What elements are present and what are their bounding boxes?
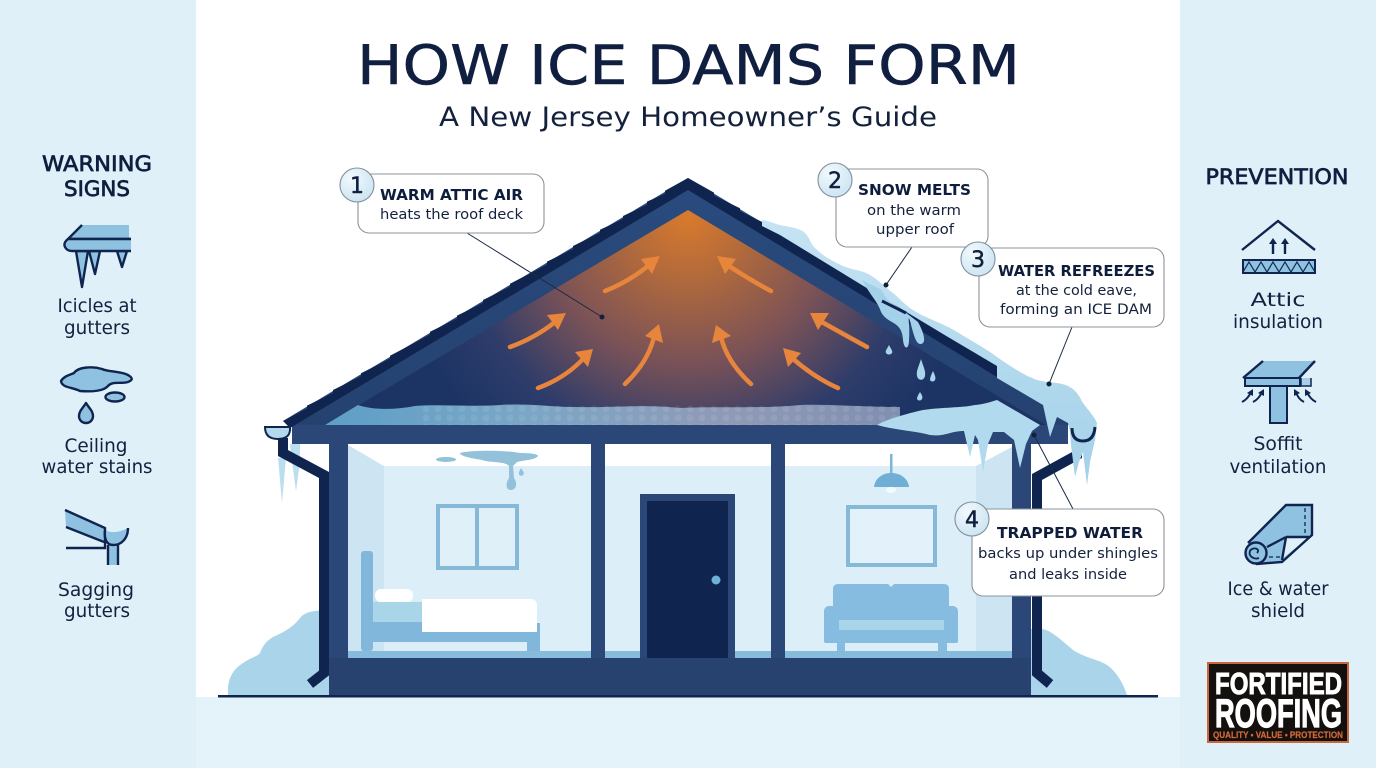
icon: soffit ventilation: [1242, 361, 1316, 423]
roof structure and beam: [283, 178, 1085, 444]
roof snow layer: [762, 220, 1097, 485]
prevention panel: [1206, 165, 1348, 622]
bedroom: [348, 445, 591, 658]
ceiling lamp: [874, 454, 909, 493]
label: sagging gutters line two: gutters: [64, 600, 130, 622]
sofa: [824, 584, 958, 651]
title: HOW ICE DAMS FORM: [357, 34, 1020, 97]
warning signs heading: WARNING: [42, 152, 152, 176]
callout 2: upper roof: [876, 222, 955, 238]
bottom strip: [196, 697, 1180, 768]
door: [640, 494, 735, 658]
house walls: [329, 444, 1031, 658]
label: icicles at gutters: Icicles at: [58, 295, 136, 317]
logo: Fortified Roofing: [1208, 663, 1348, 742]
callout 3: at the cold eave,: [1016, 283, 1137, 299]
label: sagging gutters: Sagging: [58, 579, 134, 601]
callout 3: 3: [971, 248, 985, 273]
label: ceiling water stains line two: water stains: [42, 456, 152, 478]
logo: Fortified Roofing: QUALITY • VALUE • PROTECTION: [1213, 730, 1343, 741]
callout 2: [818, 163, 988, 288]
wall picture: [848, 507, 935, 565]
callout 2: SNOW MELTS: [858, 181, 971, 199]
house floor: [329, 658, 1031, 695]
window: [436, 504, 519, 570]
callout 4: backs up under shingles: [978, 546, 1158, 562]
middle room: [605, 466, 771, 658]
snow mound left: [228, 610, 335, 695]
callout 1: heats the roof deck: [380, 207, 524, 223]
icon: attic insulation: [1242, 221, 1315, 273]
ice dam with icicles: [877, 400, 1040, 472]
callout 4: 4: [965, 508, 979, 533]
warm air arrows: [510, 256, 867, 388]
prevention heading: PREVENTION: [1206, 165, 1348, 189]
living room: [785, 447, 1012, 658]
snow mound right: [1025, 629, 1127, 695]
label: attic insulation line two: insulation: [1233, 311, 1323, 333]
melt water slit: [882, 301, 906, 313]
icon: sagging gutters: [65, 510, 128, 565]
subtitle: A New Jersey Homeowner’s Guide: [439, 102, 937, 133]
label: attic insulation: Attic: [1250, 289, 1306, 311]
warning signs heading line two: SIGNS: [64, 177, 130, 201]
label: soffit ventilation line two: ventilation: [1230, 456, 1326, 478]
left gutter and icicles: [265, 427, 324, 684]
icon: icicles at gutters: [64, 225, 131, 287]
logo: Fortified Roofing: FORTIFIED: [1215, 666, 1342, 701]
warning signs panel: [42, 152, 152, 622]
callout 3: WATER REFREEZES: [998, 262, 1155, 280]
attic warm air: [325, 210, 1046, 425]
callout 4: and leaks inside: [1009, 567, 1127, 583]
ground line: [218, 695, 1158, 698]
left roof shingles: [283, 178, 688, 428]
icon: ceiling water stains: [61, 367, 132, 423]
callout 4: TRAPPED WATER: [997, 524, 1143, 542]
label: ice and water shield: Ice & water: [1228, 578, 1329, 600]
label: soffit ventilation: Soffit: [1254, 433, 1302, 455]
ceiling water stain: [436, 451, 538, 490]
callout 1: [340, 168, 604, 320]
house illustration: [218, 178, 1158, 698]
callout 4: [955, 432, 1164, 596]
bed: [361, 551, 540, 651]
water droplets: [886, 345, 935, 400]
label: icicles at gutters line two: gutters: [64, 317, 130, 339]
central white panel: [196, 0, 1180, 697]
callout 3: forming an ICE DAM: [1000, 302, 1152, 318]
melt water streams: [862, 280, 924, 348]
callout 3: [961, 242, 1164, 386]
attic insulation: [325, 404, 900, 425]
label: ceiling water stains: Ceiling: [64, 435, 128, 457]
main beam: [292, 425, 1068, 444]
right downspout: [1037, 438, 1077, 684]
callout 2: on the warm: [867, 203, 961, 219]
icon: ice and water shield: [1246, 505, 1312, 564]
callout 1: WARM ATTIC AIR: [380, 186, 523, 204]
label: ice and water shield line two: shield: [1251, 600, 1305, 622]
right gutter: [1072, 427, 1095, 441]
callout 1: 1: [350, 174, 364, 199]
callout 2: 2: [828, 169, 842, 194]
right roof shingles: [688, 178, 997, 377]
